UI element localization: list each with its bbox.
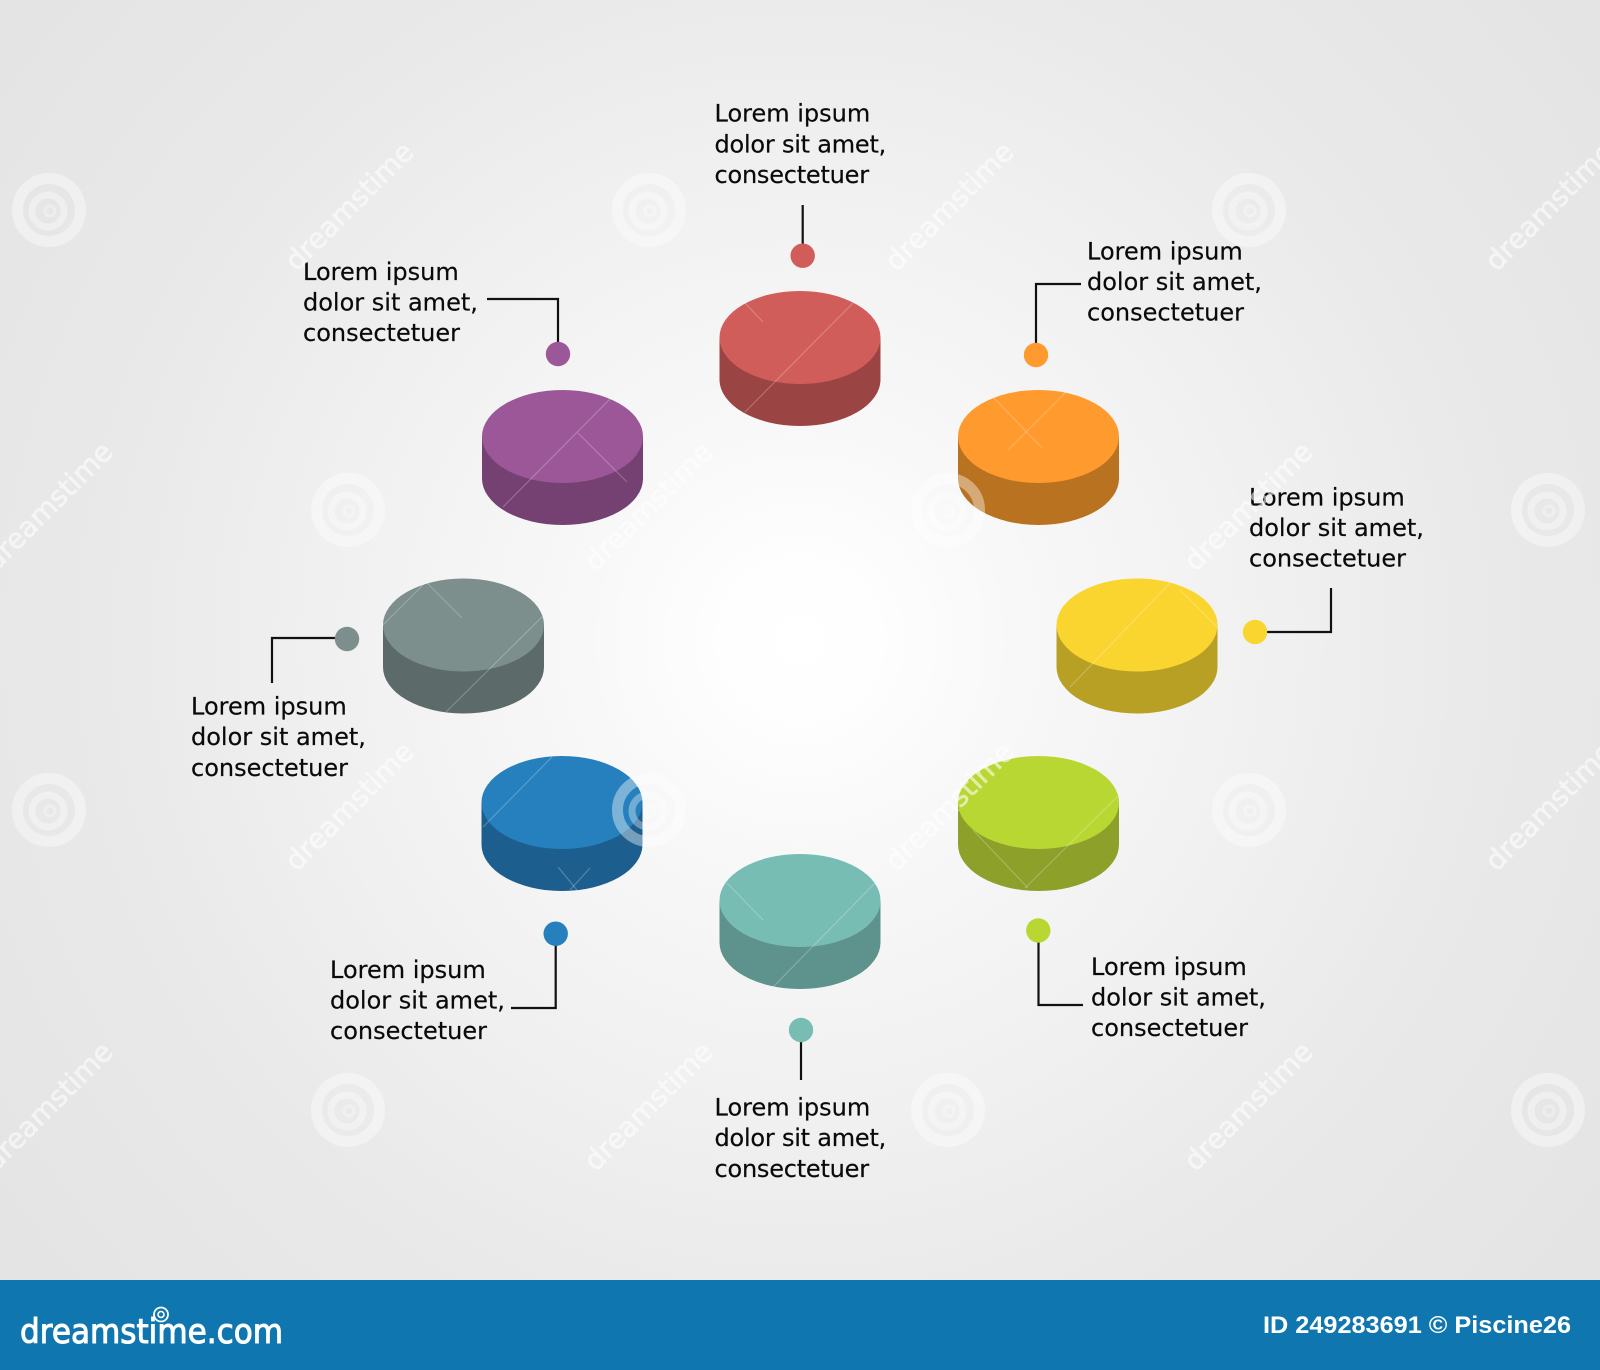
gray connector (272, 638, 337, 683)
gray cylinder (383, 578, 544, 714)
step 8: purple (303, 258, 643, 525)
orange cylinder (958, 390, 1119, 525)
teal label: Lorem ipsum (714, 1094, 870, 1122)
yellow label: Lorem ipsum (1249, 483, 1405, 511)
red dot (790, 244, 815, 268)
step 4: green (958, 756, 1266, 1042)
orange dot (1024, 343, 1048, 367)
watermark text: dreamstime (1177, 1035, 1319, 1177)
gray label: dolor sit amet, (191, 723, 366, 751)
yellow dot (1243, 620, 1267, 644)
orange label: consectetuer (1087, 299, 1244, 327)
blue label: dolor sit amet, (330, 986, 505, 1014)
purple cylinder (482, 390, 643, 525)
orange label: dolor sit amet, (1087, 268, 1262, 296)
red label: dolor sit amet, (714, 130, 886, 158)
green connector (1038, 941, 1083, 1005)
watermark lines (383, 303, 1217, 987)
step 7: gray (191, 578, 544, 782)
green dot (1026, 918, 1051, 943)
footer bar (0, 1280, 1600, 1370)
orange connector (1036, 284, 1081, 345)
watermark text: dreamstime (577, 435, 719, 577)
footer credit: ID 249283691 © Piscine26 (1263, 1312, 1571, 1339)
watermark text: dreamstime (878, 735, 1020, 877)
footer logo spiral (154, 1308, 168, 1322)
watermark text: dreamstime (1177, 435, 1319, 577)
watermark text: dreamstime (577, 1035, 719, 1177)
gray label: consectetuer (191, 754, 348, 782)
yellow label: consectetuer (1249, 545, 1406, 573)
teal label: consectetuer (714, 1155, 869, 1183)
gray label: Lorem ipsum (191, 693, 347, 721)
red cylinder (720, 291, 880, 426)
red label: consectetuer (714, 161, 869, 189)
teal connector (800, 1040, 802, 1080)
green cylinder (958, 756, 1119, 891)
step 6: blue (330, 756, 642, 1045)
purple connector (487, 299, 558, 344)
step 5: teal (714, 854, 886, 1183)
green label: dolor sit amet, (1091, 983, 1266, 1011)
green label: consectetuer (1091, 1014, 1248, 1042)
orange label: Lorem ipsum (1087, 238, 1243, 266)
purple label: Lorem ipsum (303, 258, 459, 286)
footer logo text: dreamstime.com (20, 1312, 283, 1352)
teal label: dolor sit amet, (714, 1124, 886, 1152)
watermark text: dreamstime (878, 135, 1020, 277)
purple dot (546, 342, 570, 366)
step 1: red (714, 100, 886, 426)
gray dot (335, 627, 359, 651)
blue label: consectetuer (330, 1017, 487, 1045)
yellow label: dolor sit amet, (1249, 514, 1424, 542)
step 3: yellow (1056, 483, 1424, 714)
watermark text (0, 135, 1600, 1177)
blue label: Lorem ipsum (330, 956, 486, 984)
red label: Lorem ipsum (714, 100, 870, 128)
yellow connector (1265, 588, 1331, 632)
green label: Lorem ipsum (1091, 953, 1247, 981)
blue cylinder (482, 756, 642, 891)
watermark text: dreamstime (278, 735, 420, 877)
purple label: consectetuer (303, 319, 460, 347)
teal cylinder (720, 854, 880, 989)
watermark text: dreamstime (278, 135, 420, 277)
blue connector (511, 944, 556, 1008)
red connector (802, 205, 804, 246)
teal dot (789, 1018, 813, 1042)
yellow cylinder (1056, 578, 1218, 714)
purple label: dolor sit amet, (303, 288, 478, 316)
step 2: orange (958, 238, 1262, 525)
blue dot (544, 922, 568, 946)
watermark spirals (18, 178, 1580, 1142)
